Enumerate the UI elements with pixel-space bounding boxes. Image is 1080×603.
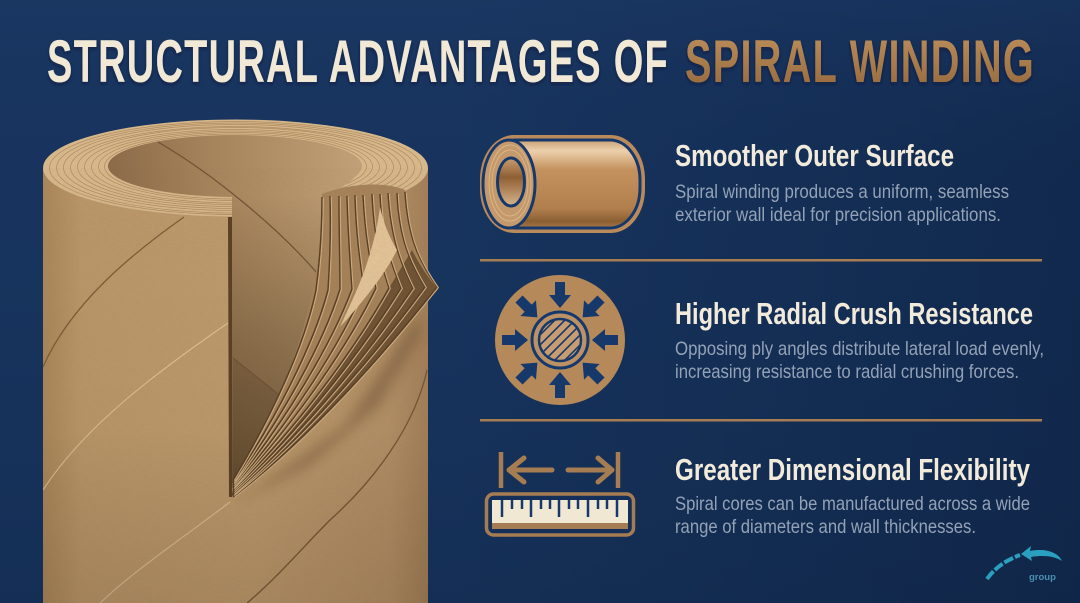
- icon: ruler with expansion arrows: [486, 452, 634, 535]
- lower shading: [43, 168, 428, 603]
- hollow core interior: [108, 135, 362, 197]
- bright inner sheet: [340, 207, 397, 327]
- interior seam lines: [158, 142, 317, 398]
- cut edge of the wrap: [228, 217, 232, 497]
- feature 2: higher radial crush resistance: [495, 275, 1044, 405]
- description: increasing resistance to radial crushing forces.: [675, 361, 1019, 383]
- heading: Smoother Outer Surface: [675, 138, 954, 173]
- description: [675, 338, 1044, 383]
- description: Spiral cores can be manufactured across a wide: [675, 493, 1030, 515]
- photo: spiral wound kraft paper core: [43, 120, 438, 603]
- description: Spiral winding produces a uniform, seamless: [675, 181, 1009, 203]
- feature 3: greater dimensional flexibility: [486, 452, 1031, 538]
- shadow under the unwinding layers: [258, 321, 423, 492]
- unwinding paper layers: [231, 184, 438, 498]
- interior wall seen through the cut: [232, 168, 362, 497]
- title: STRUCTURAL ADVANTAGES OF: [47, 28, 669, 95]
- paper fibre texture: [43, 168, 428, 603]
- icon: radial compression: [495, 275, 625, 405]
- icon: cylinder: [480, 135, 645, 233]
- description: exterior wall ideal for precision applications.: [675, 204, 1001, 226]
- description: [675, 493, 1030, 538]
- seam lines on the core: [43, 217, 427, 603]
- description: range of diameters and wall thicknesses.: [675, 516, 976, 538]
- logo: group: [1029, 572, 1056, 583]
- paper top ring: [43, 120, 428, 216]
- description: [675, 181, 1009, 226]
- logo: [987, 546, 1062, 583]
- feature 1: smoother outer surface: [480, 135, 1009, 233]
